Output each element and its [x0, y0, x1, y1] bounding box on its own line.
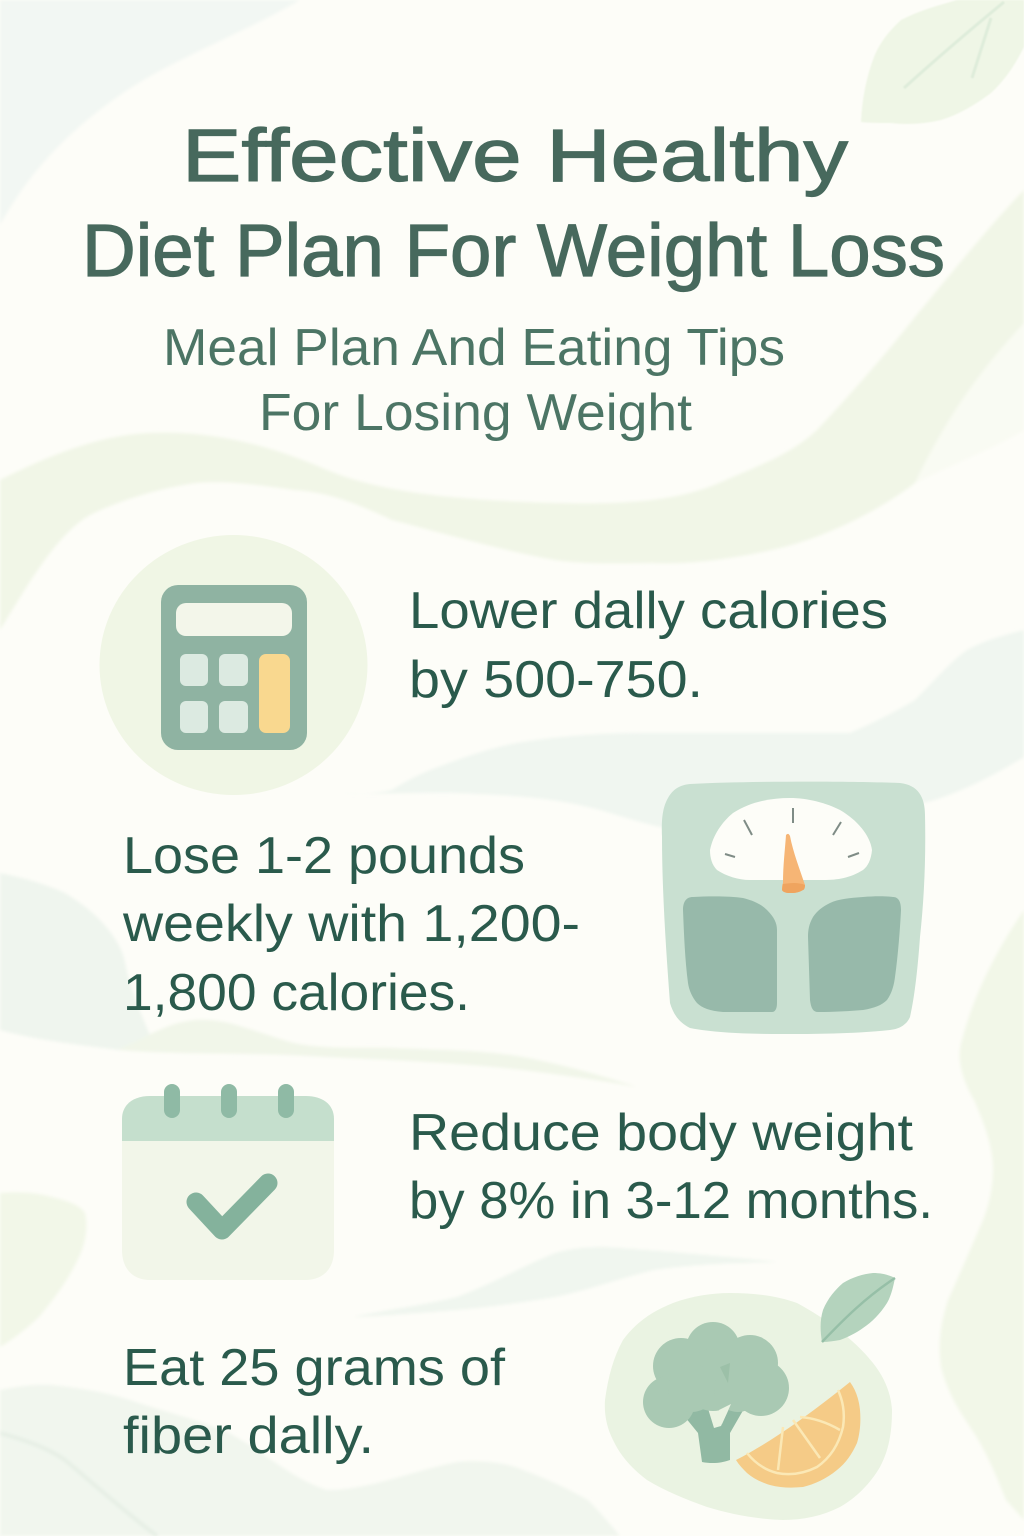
text: lower daily calories: by 500-750. [409, 651, 703, 709]
icon: broccoli and orange [605, 1273, 895, 1520]
icon: weighing scale [662, 782, 925, 1034]
text: lose pounds: 1,800 calories. [123, 964, 470, 1022]
text: eat fiber [123, 1339, 506, 1465]
text: eat fiber: fiber dally. [123, 1407, 374, 1465]
subtitle [163, 319, 785, 442]
title: Diet Plan For Weight Loss [82, 209, 945, 292]
text: lose pounds [122, 827, 580, 1022]
text: lose pounds: Lose 1-2 pounds [123, 827, 525, 885]
title [82, 114, 945, 292]
icon: calendar [122, 1084, 334, 1280]
subtitle: For Losing Weight [259, 384, 693, 442]
text: reduce body weight: by 8% in 3-12 months. [409, 1172, 933, 1230]
subtitle: Meal Plan And Eating Tips [163, 319, 785, 377]
text: reduce body weight: Reduce body weight [409, 1104, 914, 1162]
text: lower daily calories [409, 582, 888, 709]
title: Effective Healthy [182, 114, 848, 197]
text: eat fiber: Eat 25 grams of [123, 1339, 506, 1397]
decorative leaf top right [861, 0, 1024, 124]
text: lower daily calories: Lower dally calories [409, 582, 888, 640]
text: lose pounds: weekly with 1,200- [122, 895, 580, 953]
text: reduce body weight [409, 1104, 933, 1230]
icon: calculator [100, 535, 368, 795]
